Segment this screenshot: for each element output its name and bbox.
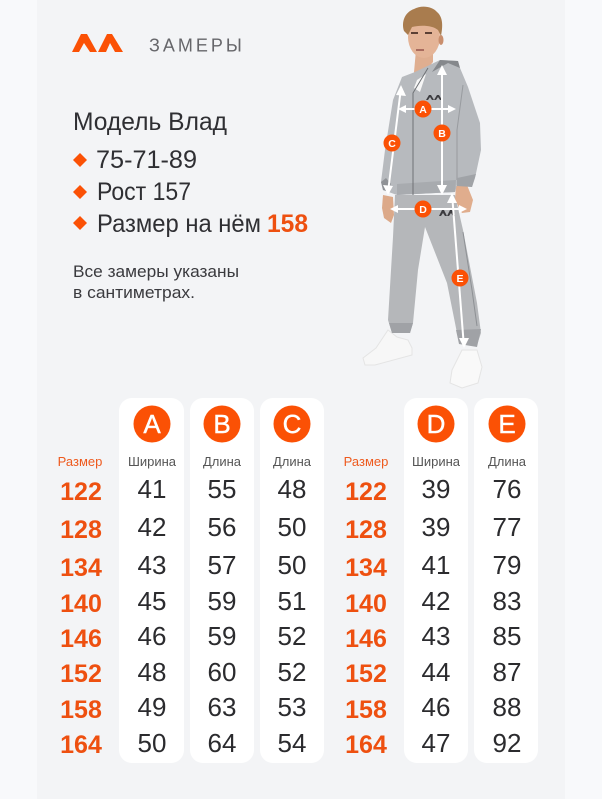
column B: 59 [208,621,236,651]
column B: 64 [208,728,236,758]
pants logo [439,210,455,216]
column B: 56 [208,512,236,542]
size column left: 128 [60,516,102,544]
column E: 85 [493,621,521,651]
right shoe [450,350,482,388]
hoodie [381,60,481,195]
column C [260,398,324,763]
column E: 79 [493,550,521,580]
column B: 59 [208,586,236,616]
size column right: Размер [344,454,388,469]
column C: 53 [278,692,306,722]
column E: E [498,409,516,439]
bullet: height: Рост 157 [97,178,191,206]
jacket logo [426,95,442,100]
size column left: 146 [60,625,102,653]
column E: 76 [493,474,521,504]
marker D [414,200,432,218]
model info: Модель Влад [73,108,227,136]
size column left: 134 [60,554,102,582]
column B: 55 [208,474,236,504]
column C: Длина [273,454,312,469]
column B: Длина [203,454,242,469]
bullet: measurements: 75-71-89 [96,146,197,174]
bullet: size worn: Размер на нём [97,210,261,238]
marker E [452,270,468,286]
note: в сантиметрах. [73,284,195,302]
size column right: 128 [345,516,387,544]
note: Все замеры указаны [73,263,239,281]
column C: 50 [278,550,306,580]
column C: 51 [278,586,306,616]
cuffs and hem [457,174,476,187]
face features [411,32,432,51]
column B: 63 [208,692,236,722]
column D: 39 [422,474,450,504]
size column right: 158 [345,696,387,724]
size column left: 152 [60,660,102,688]
column C: 52 [278,657,306,687]
column D: Ширина [412,454,461,469]
column B: B [213,409,231,439]
pants seam [463,232,477,326]
marker B: B [438,128,446,140]
bullet: size worn: 158 [267,210,308,238]
neck [414,50,433,80]
column A: 41 [138,474,166,504]
size column left: Размер [58,454,102,469]
column C: 54 [278,728,306,758]
column C: C [283,409,301,439]
size column right: 152 [345,660,387,688]
column D: 47 [422,728,450,758]
column B [190,398,254,763]
column D: 44 [422,657,450,687]
column C: 52 [278,621,306,651]
column A: 46 [138,621,166,651]
size column right: 146 [345,625,387,653]
column C: 48 [278,474,306,504]
column A: 42 [138,512,166,542]
t-shirt [414,74,426,92]
column A: 48 [138,657,166,687]
marker E: E [456,273,464,285]
size column right: 134 [345,554,387,582]
column A: 43 [138,550,166,580]
hands [382,195,394,223]
column E [474,398,538,763]
model figure with measurement arrows [363,7,482,388]
zipper [413,68,428,195]
column E: 88 [493,692,521,722]
pants [388,195,481,345]
column C: 50 [278,512,306,542]
column E: 87 [493,657,521,687]
logo [72,34,123,52]
column A: 49 [138,692,166,722]
column D: 43 [422,621,450,651]
column D: 46 [422,692,450,722]
column A: Ширина [128,454,177,469]
marker C: C [388,138,396,150]
size column left: 158 [60,696,102,724]
marker D: D [419,204,427,216]
size column right [344,454,388,759]
arrows [383,65,469,348]
size column left: 140 [60,590,102,618]
column B: 60 [208,657,236,687]
size column right: 122 [345,478,387,506]
size column left [58,454,102,759]
column E: 83 [493,586,521,616]
column A: 50 [138,728,166,758]
hair [403,7,442,36]
column E: Длина [488,454,527,469]
title: ЗАМЕРЫ [149,36,245,56]
note [73,263,239,302]
column D: 41 [422,550,450,580]
marker B [434,124,450,142]
column D: 39 [422,512,450,542]
column D: D [427,409,445,439]
marker A [414,100,432,118]
column E: 77 [493,512,521,542]
left shoe [363,330,412,365]
column E: 92 [493,728,521,758]
column D: 42 [422,586,450,616]
head [408,16,440,58]
size column left: 164 [60,731,102,759]
column A: 45 [138,586,166,616]
size column right: 140 [345,590,387,618]
model info [73,108,308,238]
marker C [384,134,400,152]
column A [119,398,184,763]
sleeve fold [457,85,463,180]
column D [404,398,468,763]
marker A: A [419,104,427,116]
size column right: 164 [345,731,387,759]
column A: A [143,409,161,439]
column B: 57 [208,550,236,580]
size column left: 122 [60,478,102,506]
